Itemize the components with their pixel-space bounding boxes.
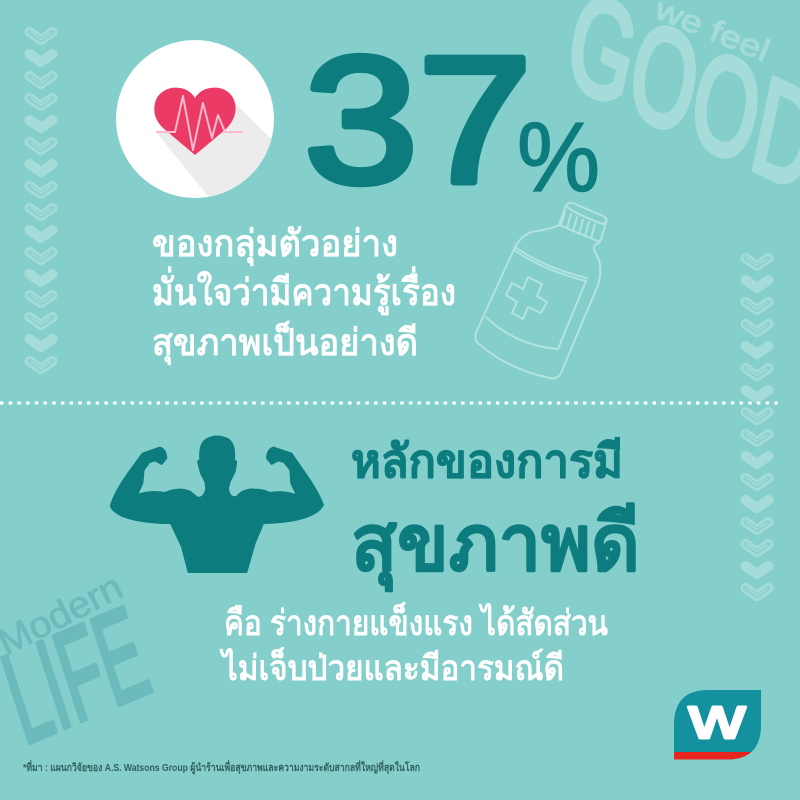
text: statistic description — [152, 223, 456, 366]
icon: heart in white circle — [116, 40, 274, 198]
icon: flexing muscular man — [111, 436, 323, 572]
icon: medicine bottle — [475, 203, 607, 378]
text: definition of good health: คือ ร่างกายแข็งแรง ได้สัดส่วน — [224, 601, 608, 643]
text: statistic description: ของกลุ่มตัวอย่าง — [152, 223, 398, 267]
heart — [154, 88, 236, 155]
text: statistic description: มั่นใจว่ามีความรู้เรื่อง — [152, 266, 456, 316]
logo: Watsons: w — [688, 686, 746, 751]
logo: Watsons — [674, 686, 764, 760]
percent sign: % — [517, 102, 600, 212]
pulse line — [156, 96, 243, 150]
long shadow — [157, 103, 272, 197]
divider: dotted line — [0, 402, 778, 404]
chevron column: left — [30, 32, 52, 369]
watermark: modern life — [0, 566, 163, 772]
footnote: source: *ที่มา : แผนกวิจัยของ A.S. Watsons Group ผู้นำร้านเพื่อสุขภาพและความงามระดับสากลที่ใหญ่ที่สุดในโลก — [23, 759, 420, 775]
chevron column: right — [746, 258, 768, 596]
statistic: 37: 37 — [304, 20, 532, 221]
heading: principles of: หลักของการมี — [351, 435, 623, 487]
heading: good health: สุขภาพดี — [351, 499, 640, 592]
text: definition of good health — [218, 601, 608, 688]
text: definition of good health: ไม่เจ็บป่วยและมีอารมณ์ดี — [218, 646, 564, 688]
text: statistic description: สุขภาพเป็นอย่างดี — [152, 319, 418, 366]
